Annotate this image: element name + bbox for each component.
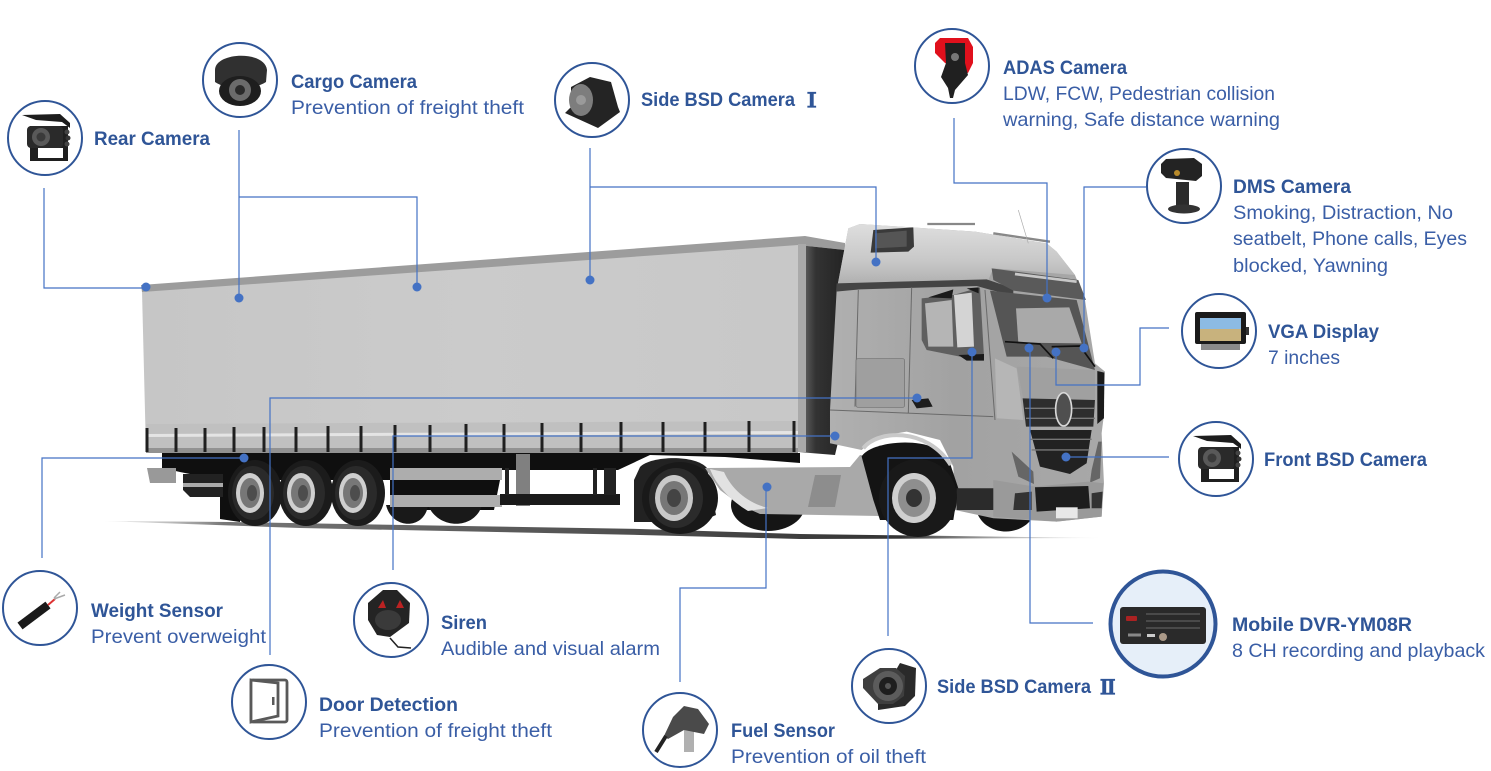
callout: DMS camera: DMS Camera [1233,176,1351,198]
rear bumper [147,468,176,483]
hood panel [1017,367,1095,400]
wipers [1005,342,1095,367]
sun visor [992,268,1086,300]
icon: fuel sensor [643,693,717,767]
callout: cargo camera: Prevention of freight theft [291,97,525,119]
icon: siren [354,583,428,657]
truck illustration [104,210,1105,539]
far side front wheel [978,515,1034,532]
callout: front BSD camera [1179,422,1427,496]
wheel arch [862,442,958,520]
landing gear [500,454,620,506]
icon: front camera [1179,422,1253,496]
side guard rails [390,468,502,507]
callout: ADAS camera: warning, Safe distance warning [1002,109,1280,131]
connection dots [142,258,1088,492]
cab [830,210,1105,522]
front fender [995,358,1023,420]
callout: side BSD camera II [852,649,1118,723]
callout: side BSD camera II: Ⅱ [1098,672,1118,700]
antenna [1018,210,1028,243]
callout: weight sensor: Prevent overweight [91,626,267,648]
callout: fuel sensor: Fuel Sensor [731,720,835,742]
trailer front end [798,245,848,455]
door handle [912,398,933,408]
callout: DMS camera [1147,149,1467,277]
top rail [141,236,845,292]
callout: VGA display: 7 inches [1268,347,1340,369]
callout: mobile DVR [1110,572,1485,676]
callout: cargo camera: Cargo Camera [291,71,417,93]
callout: weight sensor [3,571,267,648]
callout: mobile DVR: Mobile DVR-YM08R [1232,614,1412,636]
icon: round side camera [852,649,926,723]
callout: rear camera: Rear Camera [94,128,210,150]
fairing ribs [808,475,841,507]
headlights [1012,452,1034,484]
lower bumper [993,480,1103,522]
callout: ADAS camera: LDW, FCW, Pedestrian collision [1003,83,1275,105]
fairing swoosh [710,469,768,511]
callout: ADAS camera [915,29,1280,131]
roof fairing [837,224,1075,291]
cab body [830,224,1105,522]
trailer curtain [142,244,798,452]
callout: VGA display: VGA Display [1268,321,1379,343]
door window [922,287,984,357]
callout: door detection: Door Detection [319,694,458,716]
tractor rear wheel [642,462,718,534]
icon: DMS camera [1147,149,1221,223]
roof band [836,279,1013,295]
callout: weight sensor: Weight Sensor [91,600,223,622]
icon: dome camera [203,43,277,117]
callout: cargo camera [203,43,525,119]
icon: monitor [1182,294,1256,368]
leader lines [42,118,1169,682]
callout: VGA display [1182,294,1379,369]
callout: fuel sensor [643,693,927,768]
callout: door detection [232,665,553,742]
curtain buckles [147,421,794,452]
front wheel [879,459,957,537]
callout: side BSD camera I [555,63,822,137]
callout: door detection: Prevention of freight theft [319,720,553,742]
trailer chassis [162,453,800,522]
side unit [1097,371,1104,424]
star emblem [1056,393,1072,426]
icon: rear camera [8,101,82,175]
icon: ADAS camera [915,29,989,103]
callout: side BSD camera II: Side BSD Camera [937,676,1091,698]
callout: DMS camera: Smoking, Distraction, No [1233,202,1453,224]
tractor rear wheel arch [634,458,716,522]
callout: siren: Audible and visual alarm [441,638,660,660]
callout: ADAS camera: ADAS Camera [1003,57,1127,79]
icon: door [232,665,306,739]
icon: side camera [555,63,629,137]
roof vent [871,227,914,253]
callout: siren: Siren [441,612,487,634]
hidden tractor wheel [731,479,805,531]
windshield [990,291,1095,370]
trailer wheels [228,460,385,526]
roof rail [927,224,1050,242]
callout: rear camera [8,101,210,175]
side fairing [705,455,885,516]
callout: side BSD camera I: Side BSD Camera [641,89,795,111]
callout: DMS camera: seatbelt, Phone calls, Eyes [1233,228,1467,250]
door frame [830,287,995,420]
icon: DVR [1110,572,1216,676]
callout: side BSD camera I: Ⅰ [802,85,822,113]
callout: mobile DVR: 8 CH recording and playback [1232,640,1485,662]
grille [1023,398,1095,427]
callout: siren [354,583,660,660]
hidden trailer wheels [386,505,482,524]
ground shadow [104,521,1100,539]
callout: front BSD camera: Front BSD Camera [1264,449,1427,471]
number plate [1056,507,1078,518]
icon: weight sensor [3,571,77,645]
mirror [954,293,974,347]
callout: fuel sensor: Prevention of oil theft [731,746,927,768]
side step [957,488,993,510]
callout: DMS camera: blocked, Yawning [1233,255,1388,277]
door panel [856,359,905,407]
